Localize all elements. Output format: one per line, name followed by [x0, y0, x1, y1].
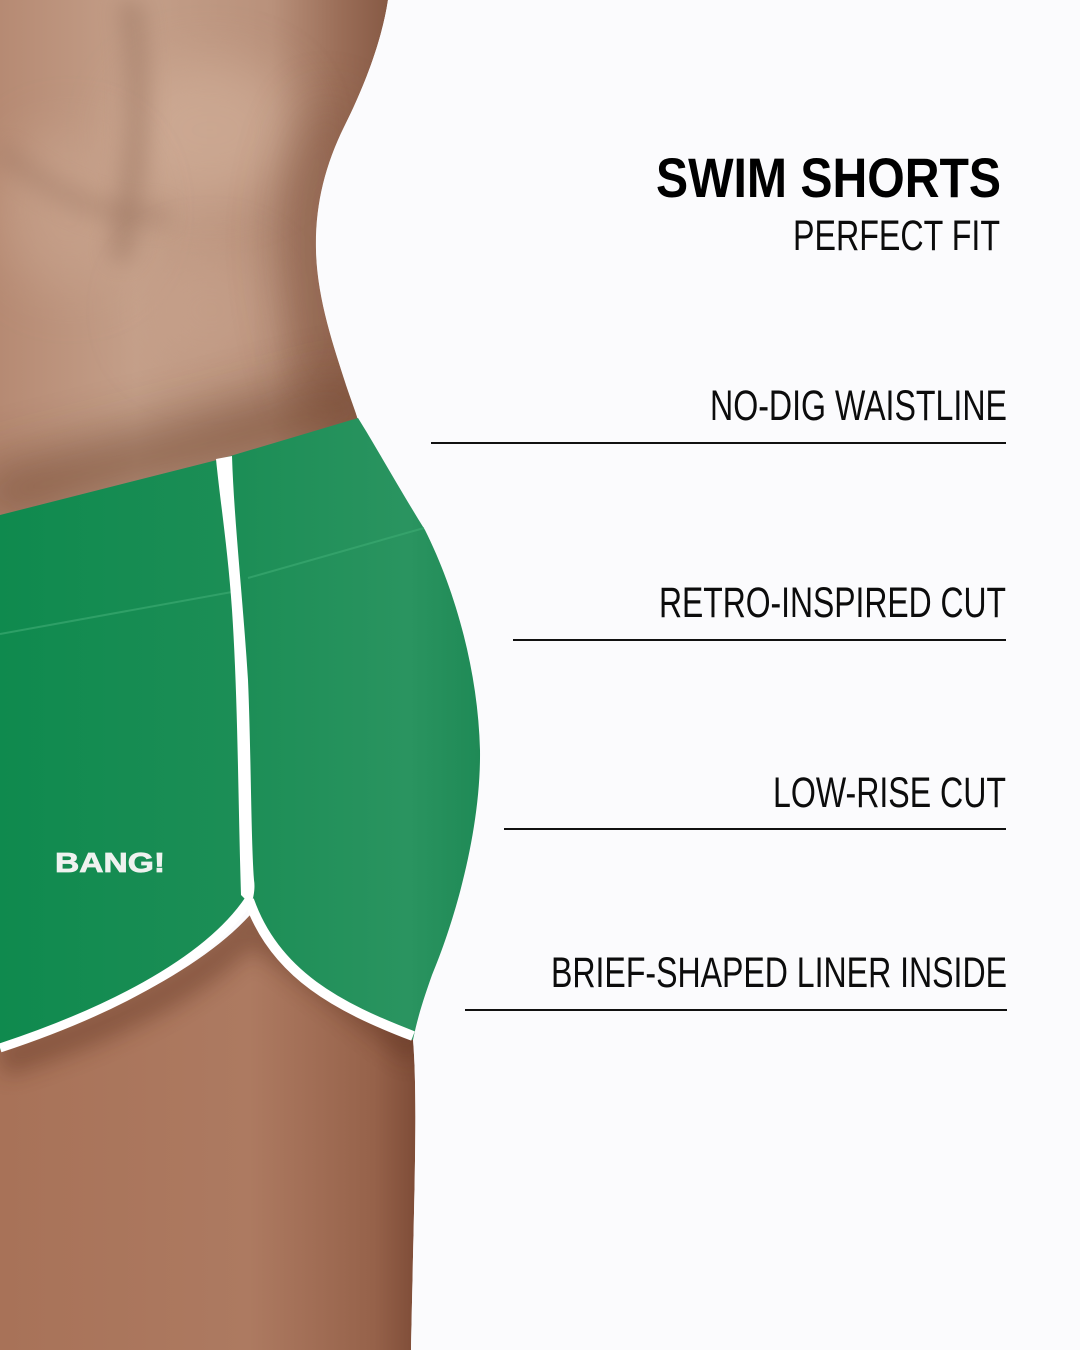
- logo: BANG!: BANG!: [55, 847, 165, 878]
- photo: model leg: [0, 915, 420, 1350]
- subtitle: PERFECT FIT: [793, 212, 1000, 260]
- feature: low-rise cut: LOW-RISE CUT: [773, 769, 1006, 817]
- waistband stitching: [0, 528, 424, 634]
- photo: model torso: [0, 0, 388, 516]
- white piping: hem right: [249, 900, 413, 1036]
- white piping: side seam: [216, 456, 254, 905]
- white piping: hem left: [0, 900, 249, 1048]
- title: SWIM SHORTS: [656, 146, 1001, 209]
- photo: green swim shorts: [0, 418, 480, 1050]
